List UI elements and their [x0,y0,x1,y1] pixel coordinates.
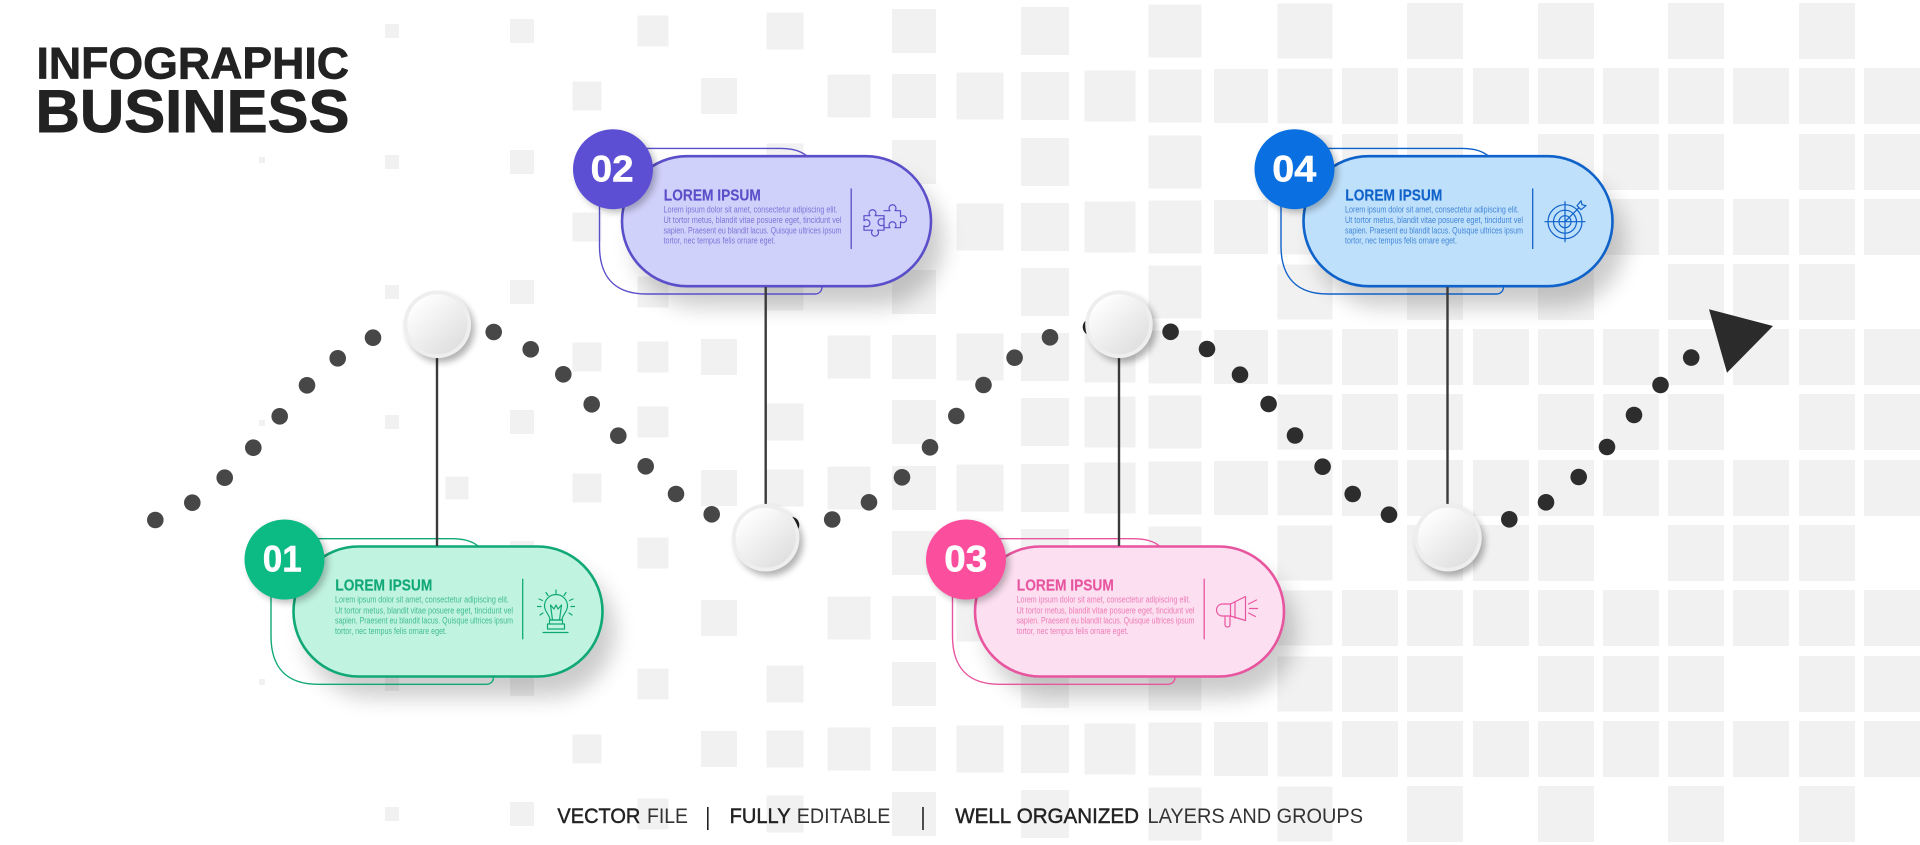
text 04: tortor, nec tempus felis ornare eget. [1345,236,1457,247]
panel: card 04 [1254,129,1625,307]
divider 02 [850,188,852,249]
text 03: tortor, nec tempus felis ornare eget. [1016,626,1128,637]
text 01: Ut tortor metus, blandit vitae posuere eget, tincidunt vel [335,605,513,616]
text 02 [664,187,842,247]
panel: card 02 [573,129,944,307]
stem lines [437,287,1448,546]
text 01 [335,578,513,637]
back outline 01 [271,539,494,684]
divider 03 [1203,579,1205,639]
number badge 01 [244,520,328,603]
back outline 03 [952,539,1175,684]
panel: card 03 [926,520,1296,697]
text 03 [1016,578,1194,637]
footer tagline: FULLY [730,805,791,828]
pill 01 [294,546,602,676]
pill 04 [1304,156,1612,286]
panel: card 01 [244,520,615,697]
text 02: Lorem ipsum dolor sit amet, consectetur adipiscing elit. [664,204,838,215]
icon: puzzle [864,205,906,236]
node 4 [1414,504,1485,576]
text 01: LOREM IPSUM [335,578,432,595]
footer tagline: VECTOR [557,805,640,828]
node 2 [732,504,803,576]
title [36,40,350,145]
text 04: Lorem ipsum dolor sit amet, consectetur adipiscing elit. [1345,204,1519,215]
text 04 [1345,187,1523,247]
pill 02 [622,156,931,286]
number badge 04 [1254,129,1338,213]
footer tagline: EDITABLE [797,805,890,828]
node 1 [404,290,474,362]
number badge 03 [926,520,1010,603]
text 03: sapien. Praesent eu blandit lacus. Quisque ultrices ipsum [1016,616,1194,627]
icon: light bulb [538,590,574,632]
number badge 01: 01 [263,539,302,580]
node 3 [1085,290,1156,362]
text 04: Ut tortor metus, blandit vitae posuere eget, tincidunt vel [1345,215,1523,226]
title: INFOGRAPHIC [36,40,349,88]
footer tagline: WELL [955,805,1011,828]
text 02: sapien. Praesent eu blandit lacus. Quisque ultrices ipsum [664,225,842,236]
footer tagline: LAYERS AND GROUPS [1148,805,1363,828]
number badge 02 [573,129,656,213]
footer tagline: ORGANIZED [1017,805,1139,828]
text 02: LOREM IPSUM [664,187,761,204]
title: BUSINESS [36,78,350,145]
text 01: Lorem ipsum dolor sit amet, consectetur adipiscing elit. [335,595,509,606]
text 01: tortor, nec tempus felis ornare eget. [335,626,447,637]
icon: megaphone [1216,596,1258,627]
back outline 02 [600,148,822,294]
text 03: LOREM IPSUM [1017,578,1114,595]
text 02: tortor, nec tempus felis ornare eget. [664,236,776,247]
number badge 04: 04 [1272,148,1317,189]
arrow head [1709,309,1773,373]
number badge 02: 02 [591,148,634,189]
text 04: sapien. Praesent eu blandit lacus. Quisque ultrices ipsum [1345,225,1523,236]
divider 04 [1532,188,1534,249]
footer tagline: FILE [647,805,688,828]
dotted wave path [147,319,1699,533]
text 01: sapien. Praesent eu blandit lacus. Quisque ultrices ipsum [335,616,513,627]
pill 03 [975,546,1284,676]
back outline 04 [1281,148,1504,294]
divider 01 [522,579,524,639]
icon: target [1545,201,1586,242]
text 02: Ut tortor metus, blandit vitae posuere eget, tincidunt vel [664,215,842,226]
text 03: Lorem ipsum dolor sit amet, consectetur adipiscing elit. [1016,595,1190,606]
footer tagline [557,805,1363,830]
text 04: LOREM IPSUM [1345,187,1442,204]
text 03: Ut tortor metus, blandit vitae posuere eget, tincidunt vel [1016,605,1194,616]
number badge 03: 03 [944,539,987,580]
